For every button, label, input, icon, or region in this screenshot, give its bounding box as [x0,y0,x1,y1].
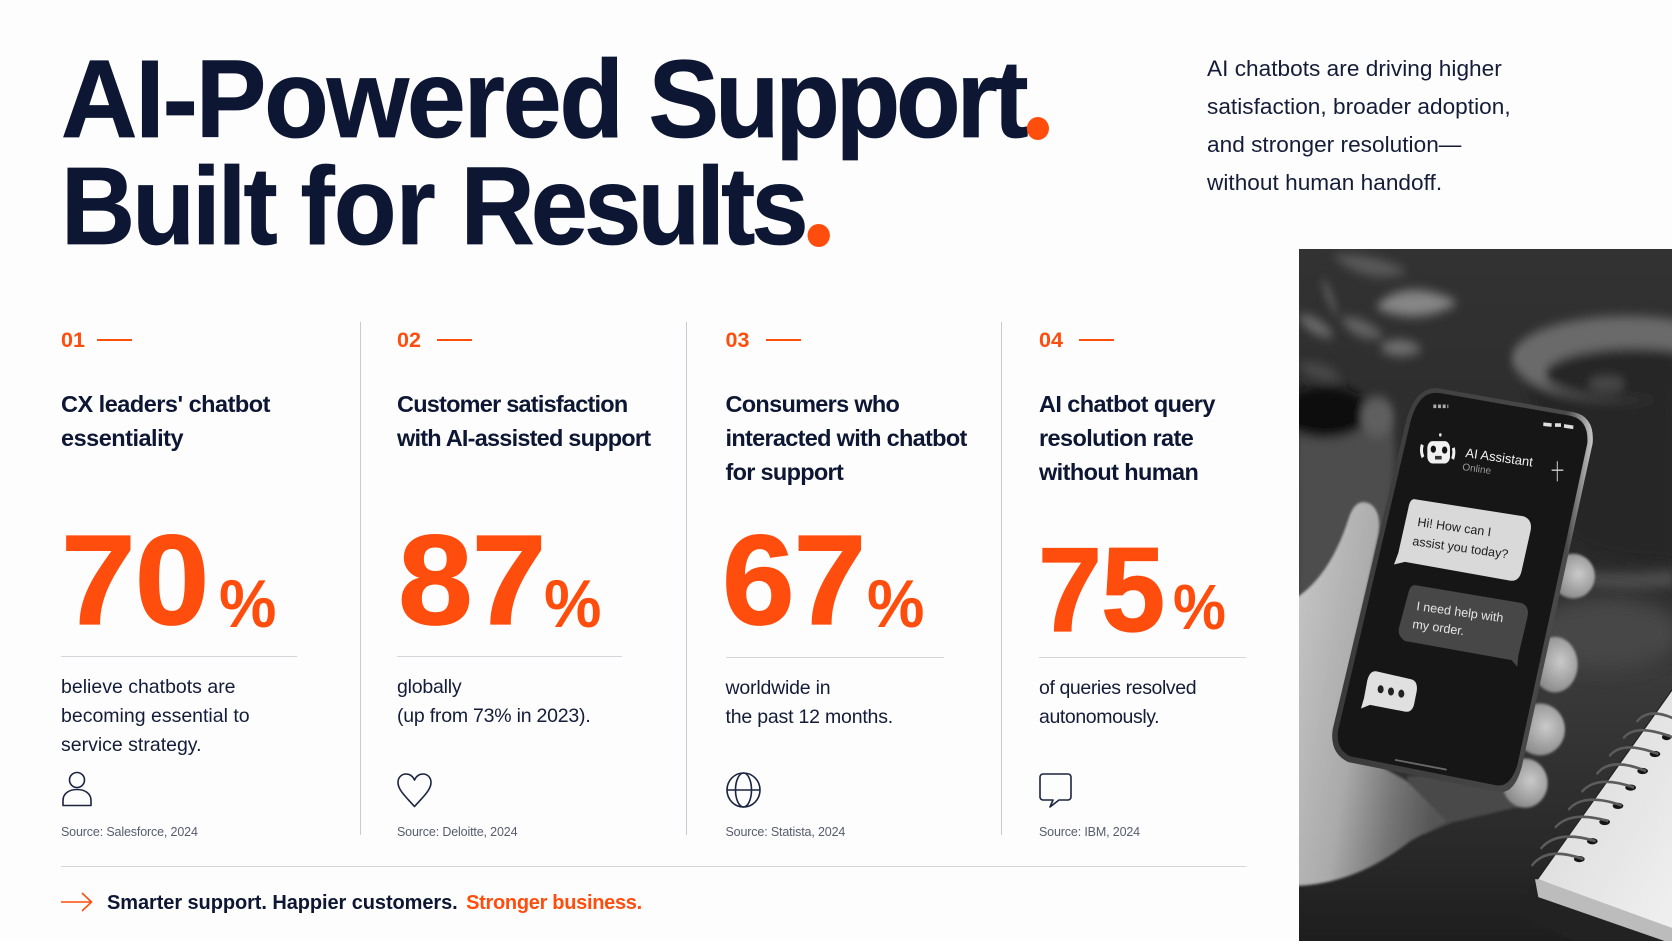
footer tagline [61,892,642,914]
notebook [1513,687,1672,941]
speech bubbles [1361,406,1573,712]
photo: hand holding phone with chatbot [1299,249,1672,941]
number 04: 04 [1039,328,1063,352]
title line 2: . [816,224,821,246]
bubble text 1: Hi! How can I [1417,515,1492,539]
description 1: believe chatbots are [61,676,236,698]
description 1 [61,676,250,756]
intro text: AI chatbots are driving higher [1207,56,1502,81]
bubble text 2: my order. [1412,617,1465,638]
icon: globe [726,772,761,808]
figure 75%: % [1173,571,1226,643]
number 01: 01 [61,328,85,352]
source 2: Source: Deloitte, 2024 [397,825,517,839]
title [61,38,1049,268]
heading 4: resolution rate [1039,425,1193,451]
heading 3: for support [726,459,843,485]
title line 2: Built for Results [61,145,805,268]
source 4: Source: IBM, 2024 [1039,825,1140,839]
bubble text 2: I need help with [1416,599,1504,625]
heading 3 [726,391,968,485]
palm shadow under phone [1407,770,1520,835]
heading 2 [397,391,651,451]
icon: arrow [61,892,93,912]
phone text: Online [1462,462,1492,477]
heading 2: with AI-assisted support [397,425,650,451]
number 03: 03 [726,328,749,352]
heading 3: interacted with chatbot [726,425,967,451]
heading 1 [61,391,270,451]
description 3: the past 12 months. [726,706,893,728]
icon: chat bubble [1039,773,1072,808]
title line 1: AI-Powered Support [61,38,1024,161]
heading 4 [1039,391,1216,485]
panel: stat 4 [1038,328,1246,839]
figure 75%: 75 [1038,523,1164,657]
description 4 [1039,677,1196,728]
panel: stat 3 [722,328,968,839]
cup and saucer [1512,316,1672,589]
heading 4: without human [1039,459,1198,485]
figure 70%: % [219,566,276,642]
icon: person [62,772,92,806]
figure 75% [1038,523,1226,657]
source 1: Source: Salesforce, 2024 [61,825,198,839]
bubble text 1 [1412,515,1509,561]
panel: stat 2 [397,328,651,839]
heading 2: Customer satisfaction [397,391,627,417]
intro text: satisfaction, broader adoption, [1207,94,1511,119]
heading 3: Consumers who [726,391,899,417]
figure 70%: 70 [61,509,208,652]
description 2: globally [397,676,461,698]
table highlight [1533,598,1672,669]
phone screen [1338,393,1587,786]
source 3: Source: Statista, 2024 [726,825,845,839]
figure 87%: 87 [398,509,545,652]
plant and pot [1280,255,1458,611]
figure 67%: % [866,566,924,642]
heading 1: CX leaders' chatbot [61,391,270,417]
phone text: AI Assistant [1465,445,1534,469]
description 3: worldwide in [726,677,830,699]
phone body [1332,388,1593,792]
bubble text 1: assist you today? [1412,534,1509,561]
icon: heart [397,773,432,808]
figure 70% [61,509,276,652]
tagline text: Smarter support. Happier customers. Stronger business. [107,892,642,914]
heading 4: AI chatbot query [1039,391,1215,417]
description 4: of queries resolved [1039,677,1196,699]
title line 1: . [1036,117,1041,139]
intro text: without human handoff. [1207,170,1442,195]
description 1: becoming essential to [61,705,250,727]
figure 67%: 67 [722,509,865,652]
intro text [1207,56,1511,195]
description 3 [726,677,893,728]
number 02: 02 [397,328,421,352]
figure 87%: % [544,566,601,642]
description 2 [397,676,591,727]
bubble text 2 [1412,599,1504,638]
description 2: (up from 73% in 2023). [397,705,591,727]
description 4: autonomously. [1039,706,1159,728]
intro text: and stronger resolution— [1207,132,1461,157]
robot icon [1421,433,1454,464]
description 1: service strategy. [61,734,202,756]
hand [1297,502,1447,886]
heading 1: essentiality [61,425,183,451]
fingers [1502,554,1595,808]
panel: stat 1 [61,328,297,839]
